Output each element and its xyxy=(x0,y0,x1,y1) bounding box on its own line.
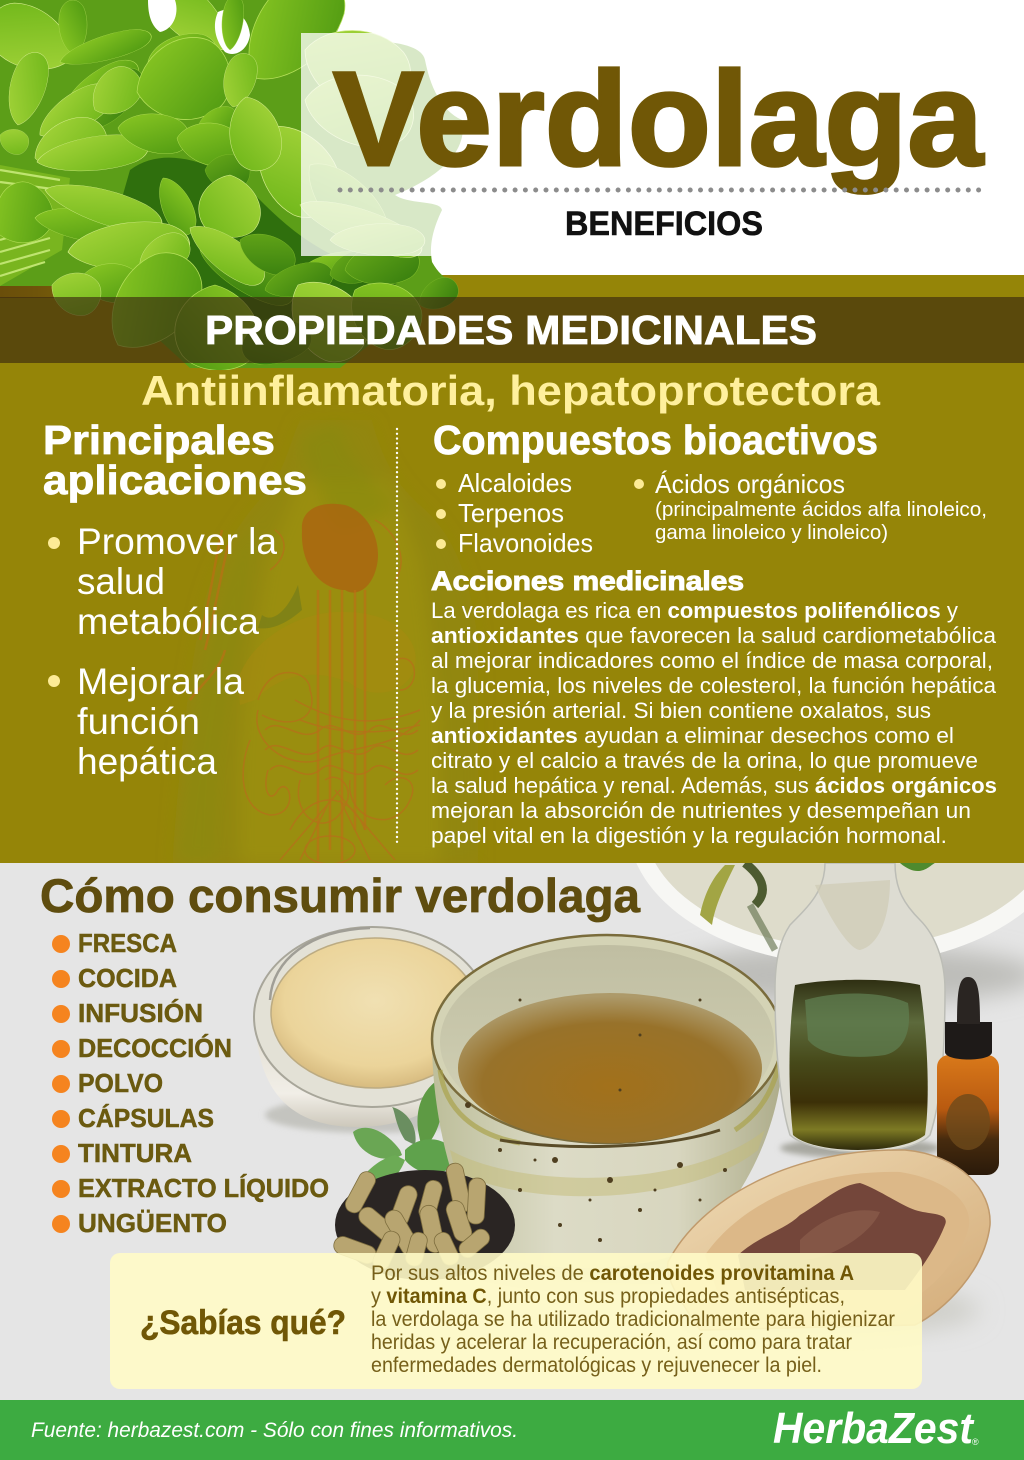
medicinal actions paragraph: la salud hepática y renal. Además, sus ácidos orgánicos xyxy=(431,773,997,798)
medicinal actions paragraph: La verdolaga es rica en compuestos polifenólicos y xyxy=(431,598,959,623)
list labels: INFUSIÓN xyxy=(78,998,203,1028)
application 2 xyxy=(77,661,244,782)
application 2: hepática xyxy=(77,741,217,782)
panel: consumption background xyxy=(0,863,1024,1400)
image: dropper bottle xyxy=(937,977,999,1175)
callout text: heridas y acelerar la recuperación, así como para tratar xyxy=(371,1330,852,1354)
medicinal actions paragraph xyxy=(431,598,997,848)
logo registered mark: ® xyxy=(972,1437,979,1447)
compound note xyxy=(655,499,987,544)
subheading: properties: Antiinflamatoria, hepatoprotectora xyxy=(141,367,881,414)
heading: acciones medicinales: Acciones medicinales xyxy=(431,566,744,596)
section heading: propiedades medicinales: PROPIEDADES MEDICINALES xyxy=(205,307,817,353)
list labels: FRESCA xyxy=(78,928,177,958)
callout text: y vitamina C, junto con sus propiedades antisépticas, xyxy=(371,1284,845,1308)
compound note: (principalmente ácidos alfa linoleico, xyxy=(655,499,987,521)
image: wooden plate with powder xyxy=(668,1150,990,1336)
list labels: UNGÜENTO xyxy=(78,1208,227,1238)
bullet: mejorar xyxy=(48,675,60,687)
heading: principales aplicaciones: aplicaciones xyxy=(43,457,307,503)
list labels: DECOCCIÓN xyxy=(78,1033,232,1063)
callout: sabias que xyxy=(110,1253,922,1389)
list labels: POLVO xyxy=(78,1068,163,1098)
white gaps between leaves xyxy=(148,0,250,54)
application 1 xyxy=(77,521,277,642)
header white background xyxy=(0,0,1024,275)
list bullets xyxy=(52,935,70,1233)
translucent title panel xyxy=(301,33,1024,256)
image: green sprig xyxy=(353,1082,450,1179)
application 2: función xyxy=(77,701,200,742)
compound list: Ácidos orgánicos xyxy=(655,469,845,499)
medicinal actions paragraph: y la presión arterial. Si bien contiene oxalatos, sus xyxy=(431,698,931,723)
consumption list xyxy=(52,928,329,1238)
medicinal actions paragraph: antioxidantes que favorecen la salud cardiometabólica xyxy=(431,623,996,648)
list labels: TINTURA xyxy=(78,1138,192,1168)
callout text: enfermedades dermatológicas y rejuvenecer la piel. xyxy=(371,1353,822,1377)
list labels xyxy=(78,928,329,1238)
heading: principales aplicaciones xyxy=(43,417,307,503)
compound list xyxy=(458,468,845,558)
heading: principales aplicaciones: Principales xyxy=(43,417,275,463)
dotted column divider xyxy=(396,429,398,843)
bullet: promover xyxy=(48,537,60,549)
footer bar xyxy=(0,1400,1024,1460)
callout text: la verdolaga se ha utilizado tradicionalmente para higienizar xyxy=(371,1307,895,1331)
logo: herbazest: HerbaZest xyxy=(773,1404,975,1453)
subtitle: BENEFICIOS xyxy=(565,205,763,243)
image: salve tin xyxy=(254,927,490,1133)
application 1: metabólica xyxy=(77,601,259,642)
callout text xyxy=(371,1261,895,1377)
image: purslane leaves bunch xyxy=(0,0,463,375)
application 2: Mejorar la xyxy=(77,661,244,702)
olive background panel xyxy=(0,275,1024,863)
compound note: gama linoleico y linoleico) xyxy=(655,522,888,544)
heading: como consumir verdolaga: Cómo consumir verdolaga xyxy=(40,869,641,922)
heading: compuestos bioactivos: Compuestos bioactivos xyxy=(433,417,878,463)
panel: compuestos bioactivos xyxy=(433,417,987,558)
list labels: COCIDA xyxy=(78,963,177,993)
image: oil bottle xyxy=(775,863,945,1158)
compound list: Terpenos xyxy=(458,498,564,528)
dark band xyxy=(0,297,1024,363)
medicinal actions paragraph: citrato y el calcio a través de la orina, lo que promueve xyxy=(431,748,978,773)
callout heading: ¿Sabías qué? xyxy=(140,1304,346,1342)
image: capsule bowl xyxy=(331,1162,515,1280)
medicinal actions paragraph: mejoran la absorción de nutrientes y desempeñan un xyxy=(431,798,971,823)
list labels: EXTRACTO LÍQUIDO xyxy=(78,1173,329,1203)
compound list: Alcaloides xyxy=(458,468,572,498)
callout box xyxy=(110,1253,922,1389)
callout text: Por sus altos niveles de carotenoides provitamina A xyxy=(371,1261,854,1285)
medicinal actions paragraph: la glucemia, los niveles de colesterol, la función hepática xyxy=(431,673,996,698)
image: soup bowl xyxy=(636,863,1024,1011)
image: products photo xyxy=(254,685,1024,1336)
panel: anatomy illustration xyxy=(189,432,432,863)
panel: acciones medicinales xyxy=(431,566,997,848)
medicinal actions paragraph: papel vital en la digestión y la regulación hormonal. xyxy=(431,823,947,848)
application 1: Promover la xyxy=(77,521,277,562)
compound list: Flavonoides xyxy=(458,528,593,558)
medicinal actions paragraph: al mejorar indicadores como el índice de masa corporal, xyxy=(431,648,993,673)
brown shading under stems xyxy=(0,278,200,298)
list labels: CÁPSULAS xyxy=(78,1103,214,1133)
footer source: Fuente: herbazest.com - Sólo con fines informativos. xyxy=(31,1419,518,1442)
medicinal actions paragraph: antioxidantes ayudan a eliminar desechos como el xyxy=(431,723,954,748)
dotted title divider xyxy=(340,188,985,192)
application 1: salud xyxy=(77,561,165,602)
panel: principales aplicaciones xyxy=(43,417,307,782)
compound bullets xyxy=(436,479,644,549)
image: ceramic cup xyxy=(430,934,780,1253)
title: Verdolaga xyxy=(333,45,984,194)
